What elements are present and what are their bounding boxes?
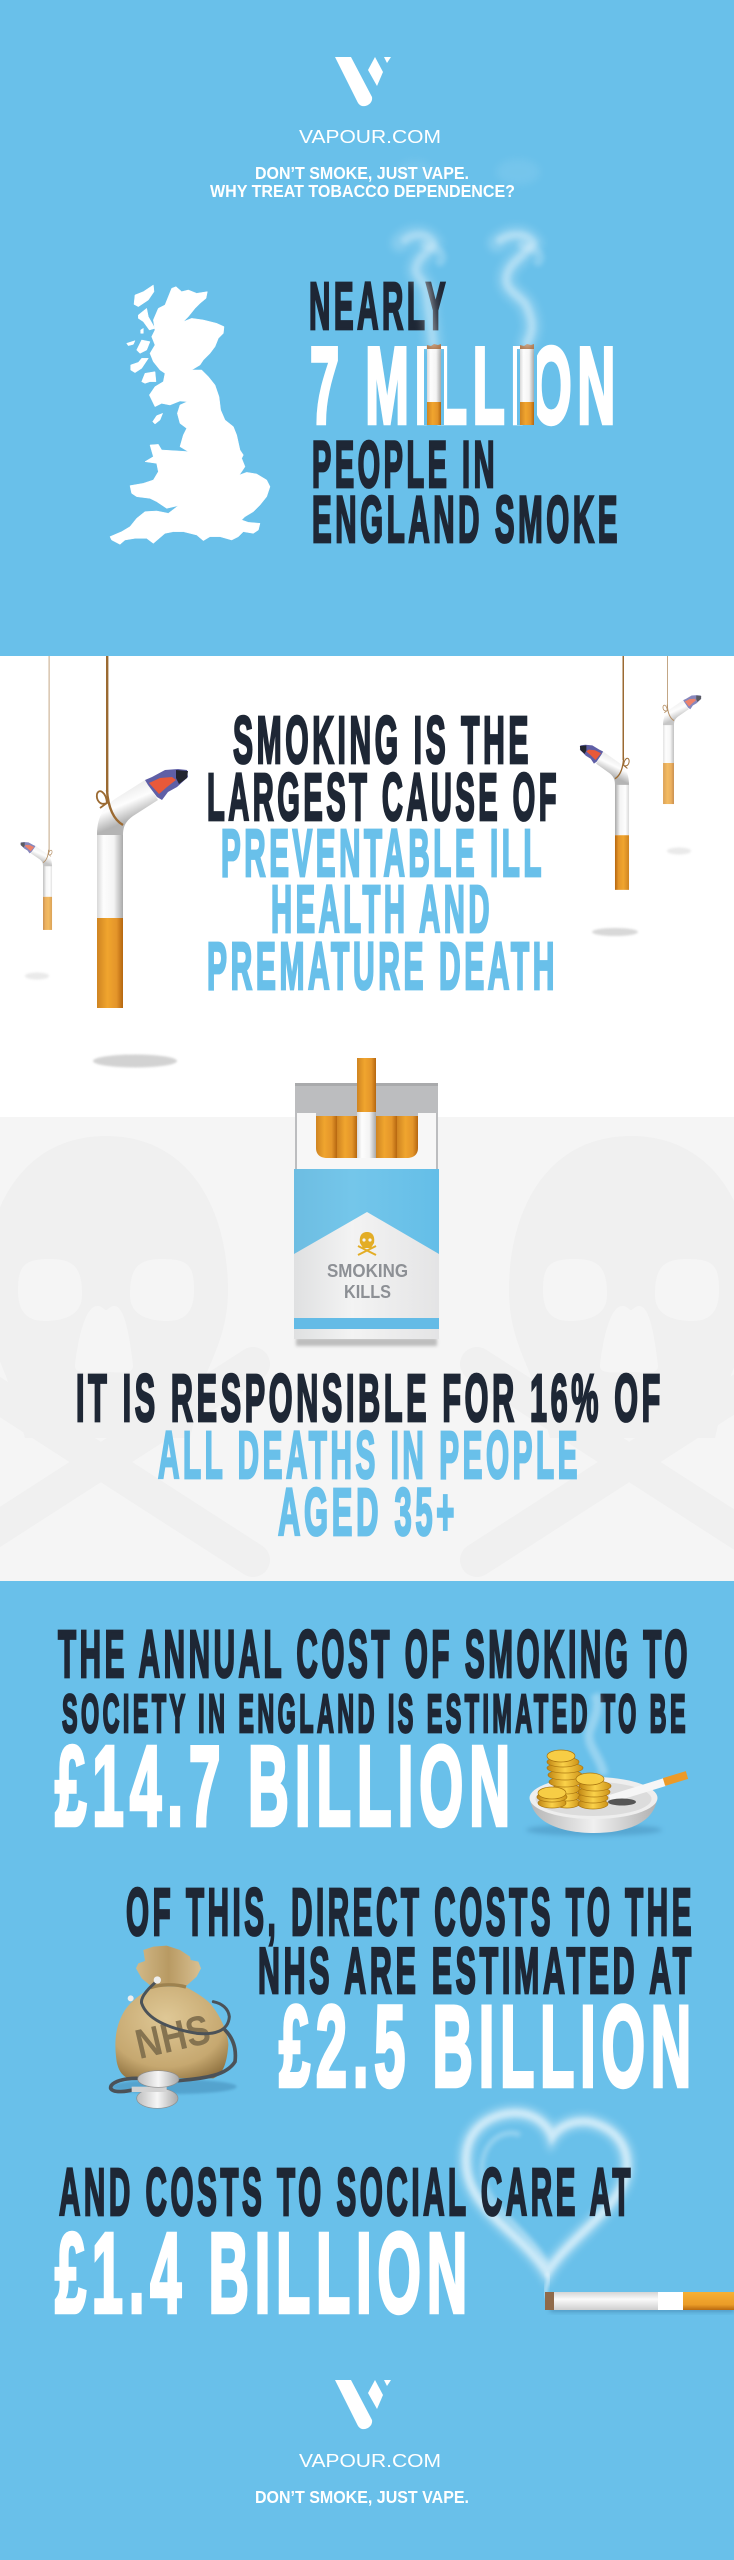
- top blue panel: [0, 0, 734, 656]
- logo: bottom: [299, 2380, 441, 2471]
- tagline: bottom: DON’T SMOKE, JUST VAPE.: [255, 2487, 469, 2507]
- icon: cigarette as first I: [424, 344, 444, 425]
- icon: horizontal cigarette: [545, 2292, 734, 2312]
- text block: NHS costs: [126, 1875, 697, 2111]
- icon: small hanged cigarette left: [21, 656, 52, 980]
- icon: large hanged cigarette: [93, 656, 188, 1068]
- background: skull and crossbones right: [477, 1136, 734, 1572]
- cigarettes in pack: [316, 1116, 418, 1160]
- pack label: SMOKING: [327, 1260, 408, 1281]
- brand name: VAPOUR.COM: [299, 127, 441, 147]
- heading: nearly 7 million people in England smoke: PEOPLE IN: [312, 427, 498, 501]
- text block: annual cost: [55, 1617, 691, 1849]
- map: United Kingdom: [110, 285, 270, 544]
- smoke heart: [466, 2113, 627, 2298]
- heading: 16% of all deaths: [76, 1361, 664, 1550]
- heading: nearly 7 million people in England smoke: [309, 269, 621, 556]
- icon: NHS money bag with stethoscope: [110, 1946, 237, 2108]
- cigarette in ashtray: [608, 1775, 687, 1806]
- icon: V mark: [335, 57, 391, 106]
- tagline: top: [210, 163, 515, 201]
- smoke from ashtray: [589, 1694, 604, 1775]
- smoke: rising from first cigarette: [400, 235, 442, 343]
- heading: 16% of all deaths: AGED 35+: [278, 1475, 458, 1550]
- raised cigarette: [357, 1058, 376, 1158]
- grey panel background: [0, 1117, 734, 1581]
- tagline: top: WHY TREAT TOBACCO DEPENDENCE?: [210, 181, 515, 201]
- pack label: KILLS: [344, 1281, 391, 1302]
- icon: V mark: [335, 2380, 391, 2429]
- text block: social care costs: [55, 2155, 634, 2336]
- background: skull and crossbones left: [0, 1136, 253, 1572]
- heading: largest cause of preventable ill health: [207, 703, 560, 1004]
- brand name: VAPOUR.COM: [299, 2451, 441, 2471]
- icon: medium hanged cigarette right: [580, 656, 638, 936]
- white panel background: [0, 656, 734, 1117]
- heading: nearly 7 million people in England smoke: NEARLY: [309, 269, 449, 344]
- stethoscope: [111, 1976, 235, 2108]
- smoke: faint puffs near tagline: [397, 159, 540, 185]
- coin stacks: [537, 1750, 611, 1809]
- icon: ashtray with coins: [526, 1694, 687, 1836]
- bottom blue panel: [0, 1581, 734, 2560]
- icon: cigarette pack: [294, 1058, 439, 1346]
- logo: top: [299, 57, 441, 147]
- bag label: NHS: [131, 2005, 214, 2068]
- pack label: [327, 1260, 408, 1302]
- icon: small hanged cigarette right: [663, 656, 701, 854]
- smoke: rising from second cigarette: [497, 235, 540, 343]
- tagline: top: DON’T SMOKE, JUST VAPE.: [255, 163, 469, 183]
- icon: gold skull: [358, 1232, 376, 1255]
- icon: cigarette as second I: [517, 344, 537, 425]
